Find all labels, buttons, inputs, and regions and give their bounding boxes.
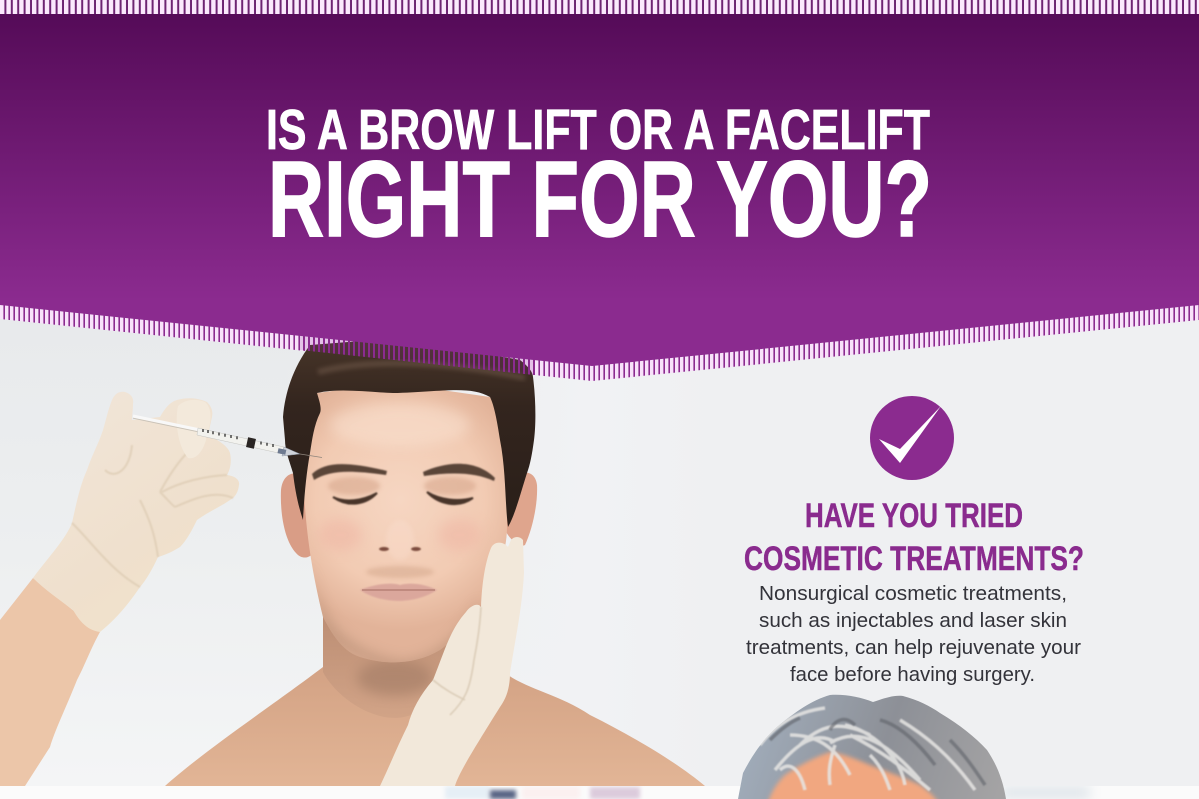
shoulders [165,667,705,786]
body text: face before having surgery. [790,663,1035,686]
body text [746,582,1081,686]
purple stripes over the head [300,330,534,375]
photo: arm and gloved hand with syringe [0,392,322,786]
right ear [505,473,537,546]
neck [323,600,490,718]
photo: top of older man's head [735,690,1010,799]
title line 2: RIGHT FOR YOU? [268,138,932,259]
title [266,98,932,259]
nose [379,547,389,551]
heading: have you tried cosmetic treatments [744,497,1084,578]
arm [0,578,100,786]
grey hair strands [760,708,975,790]
title line 1: IS A BROW LIFT OR A FACELIFT [266,98,930,162]
lips [360,584,437,601]
body text: such as injectables and laser skin [759,609,1067,632]
stubble and shading [318,402,478,662]
photo: man receiving injection [165,338,705,786]
closed eyes [333,493,377,504]
header banner [0,14,1199,366]
glove [33,392,239,632]
body text: Nonsurgical cosmetic treatments, [759,582,1067,605]
glove finger folds [72,435,233,587]
bottom white strip [0,786,1199,799]
heading: have you tried cosmetic treatments: COSMETIC TREATMENTS? [744,540,1084,578]
syringe [133,416,322,458]
gloved hand on cheek [380,537,524,786]
top stripe border [0,0,1199,14]
hair [283,338,535,527]
face [303,383,507,662]
pink striped band under header [0,300,1199,381]
icon: check mark in circle [870,396,954,480]
heading: have you tried cosmetic treatments: HAVE YOU TRIED [805,497,1023,535]
eyebrows [312,464,387,480]
body text: treatments, can help rejuvenate your [746,636,1081,659]
left ear [281,473,313,558]
